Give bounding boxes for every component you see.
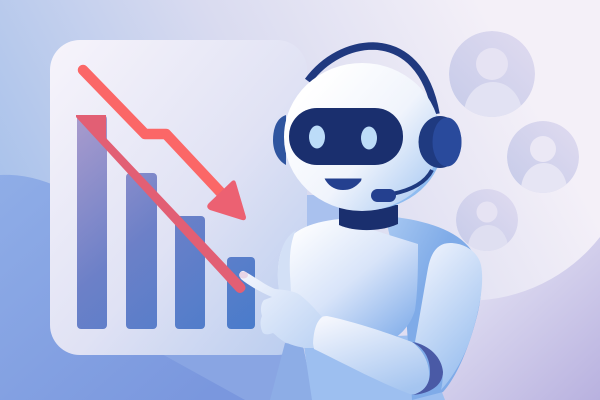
- bar chart: [77, 115, 255, 329]
- icon: user avatar top: [449, 31, 535, 117]
- robot left ear: [273, 115, 286, 165]
- robot eyes: [309, 126, 377, 150]
- robot torso: [278, 219, 418, 348]
- robot torso side shading: [278, 230, 296, 323]
- robot smile: [325, 178, 362, 190]
- robot neck: [339, 205, 398, 230]
- robot forearm: [313, 316, 429, 395]
- robot hand: [240, 271, 322, 348]
- icon: user avatar lower: [456, 189, 518, 251]
- robot visor: [289, 108, 403, 165]
- robot: [239, 46, 482, 400]
- panel: chart card: [50, 40, 307, 355]
- robot lower torso: [270, 335, 445, 400]
- robot head: [284, 63, 440, 211]
- robot right shoulder: [385, 216, 481, 400]
- robot raised arm: [415, 243, 482, 390]
- arrow: trend line over bars: [76, 115, 246, 293]
- icon: user avatar middle: [507, 121, 579, 193]
- robot head glow: [291, 74, 443, 210]
- robot microphone: [371, 170, 432, 202]
- robot headset ear cup: [418, 116, 462, 168]
- arrow: upper downward trend: [83, 70, 246, 220]
- robot fingertip: [239, 272, 248, 278]
- robot headband: [308, 46, 436, 114]
- robot cuff: [412, 342, 443, 395]
